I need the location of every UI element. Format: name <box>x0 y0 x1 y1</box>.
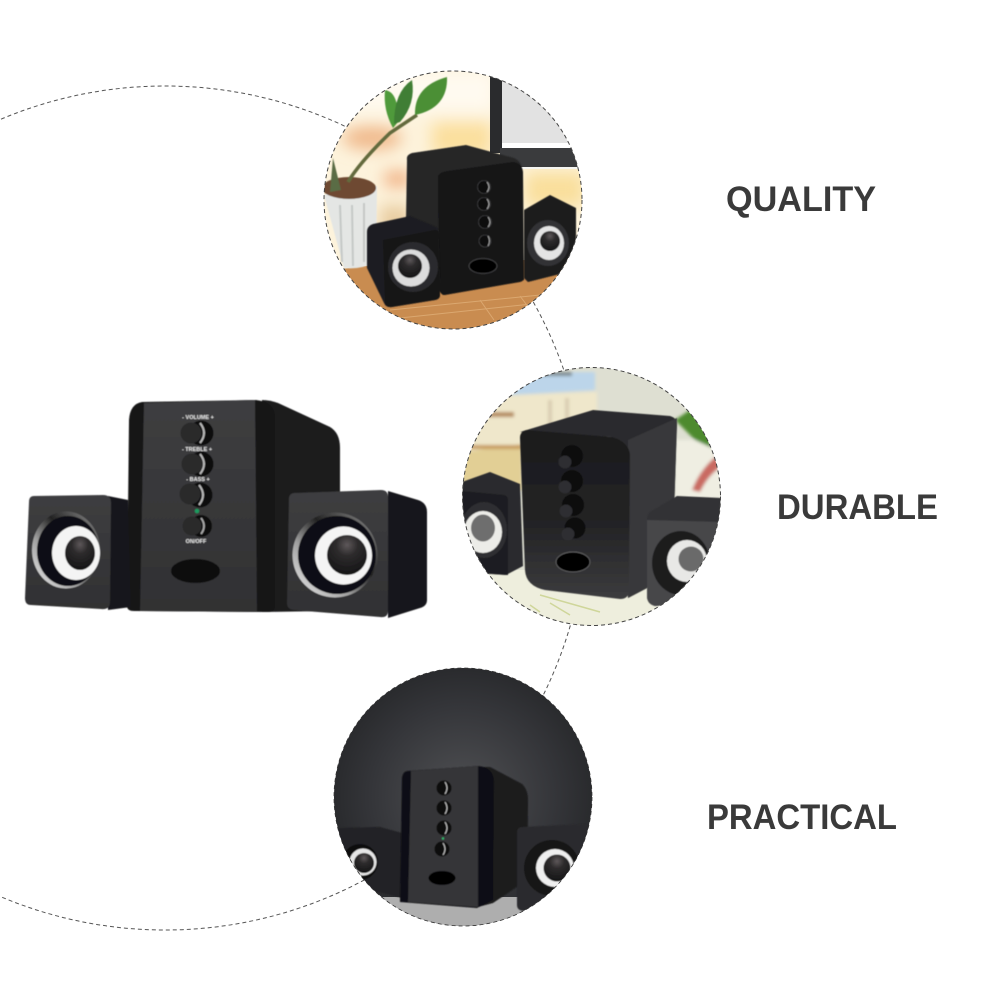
photo: desk scene (quality) <box>322 71 585 329</box>
subwoofer <box>127 400 340 612</box>
bass port <box>428 871 456 885</box>
photo: bookshelf scene (durable) <box>461 367 725 626</box>
dashed outline: durable photo <box>462 368 720 626</box>
knobs <box>434 780 452 856</box>
dark backdrop <box>334 668 592 926</box>
blurred room <box>337 71 582 223</box>
bass knob <box>180 482 212 508</box>
knob caps <box>558 456 574 540</box>
knob highlights <box>487 182 490 246</box>
control labels: ON/OFF <box>186 539 207 545</box>
control labels: - TREBLE + <box>182 447 212 453</box>
knobs <box>561 445 586 538</box>
right satellite speaker <box>287 490 427 618</box>
subwoofer <box>406 145 524 295</box>
bass port <box>469 258 497 274</box>
wood grain <box>390 294 540 320</box>
knob highlights <box>443 782 447 855</box>
white lower right <box>540 880 600 926</box>
dashed connector circle <box>0 86 587 930</box>
indicator <box>442 837 444 840</box>
bass port <box>556 552 590 572</box>
heading: DURABLE: DURABLE <box>777 488 938 527</box>
left satellite speaker <box>461 472 523 575</box>
dashed outline: quality photo <box>324 71 582 329</box>
left satellite speaker <box>334 827 402 898</box>
knobs <box>478 180 492 247</box>
photo: studio scene (practical) <box>334 668 600 926</box>
monitor <box>490 77 578 169</box>
background <box>324 71 582 329</box>
right satellite speaker <box>517 824 590 911</box>
control labels: - VOLUME + <box>182 415 214 421</box>
left satellite speaker <box>367 216 440 307</box>
control labels <box>182 415 214 545</box>
wood table <box>344 258 568 329</box>
background <box>462 367 721 626</box>
volume knob <box>180 420 214 446</box>
heading: PRACTICAL: PRACTICAL <box>707 798 897 837</box>
potted plant <box>322 77 447 268</box>
tabletop <box>489 570 659 626</box>
twig decoration <box>530 595 600 615</box>
heading: QUALITY: QUALITY <box>726 180 876 219</box>
dashed outline: practical photo <box>334 668 592 926</box>
power button <box>182 515 212 537</box>
power indicator <box>195 509 199 513</box>
right satellite speaker <box>647 496 722 606</box>
left satellite speaker <box>25 495 131 610</box>
right satellite speaker <box>524 195 576 282</box>
subwoofer <box>400 766 528 908</box>
control labels: - BASS + <box>186 477 210 483</box>
blurred books <box>462 372 725 500</box>
floor <box>382 897 543 926</box>
main product: speaker set <box>25 400 427 618</box>
bass port <box>171 559 220 583</box>
subwoofer <box>520 410 677 599</box>
treble knob <box>182 452 214 476</box>
